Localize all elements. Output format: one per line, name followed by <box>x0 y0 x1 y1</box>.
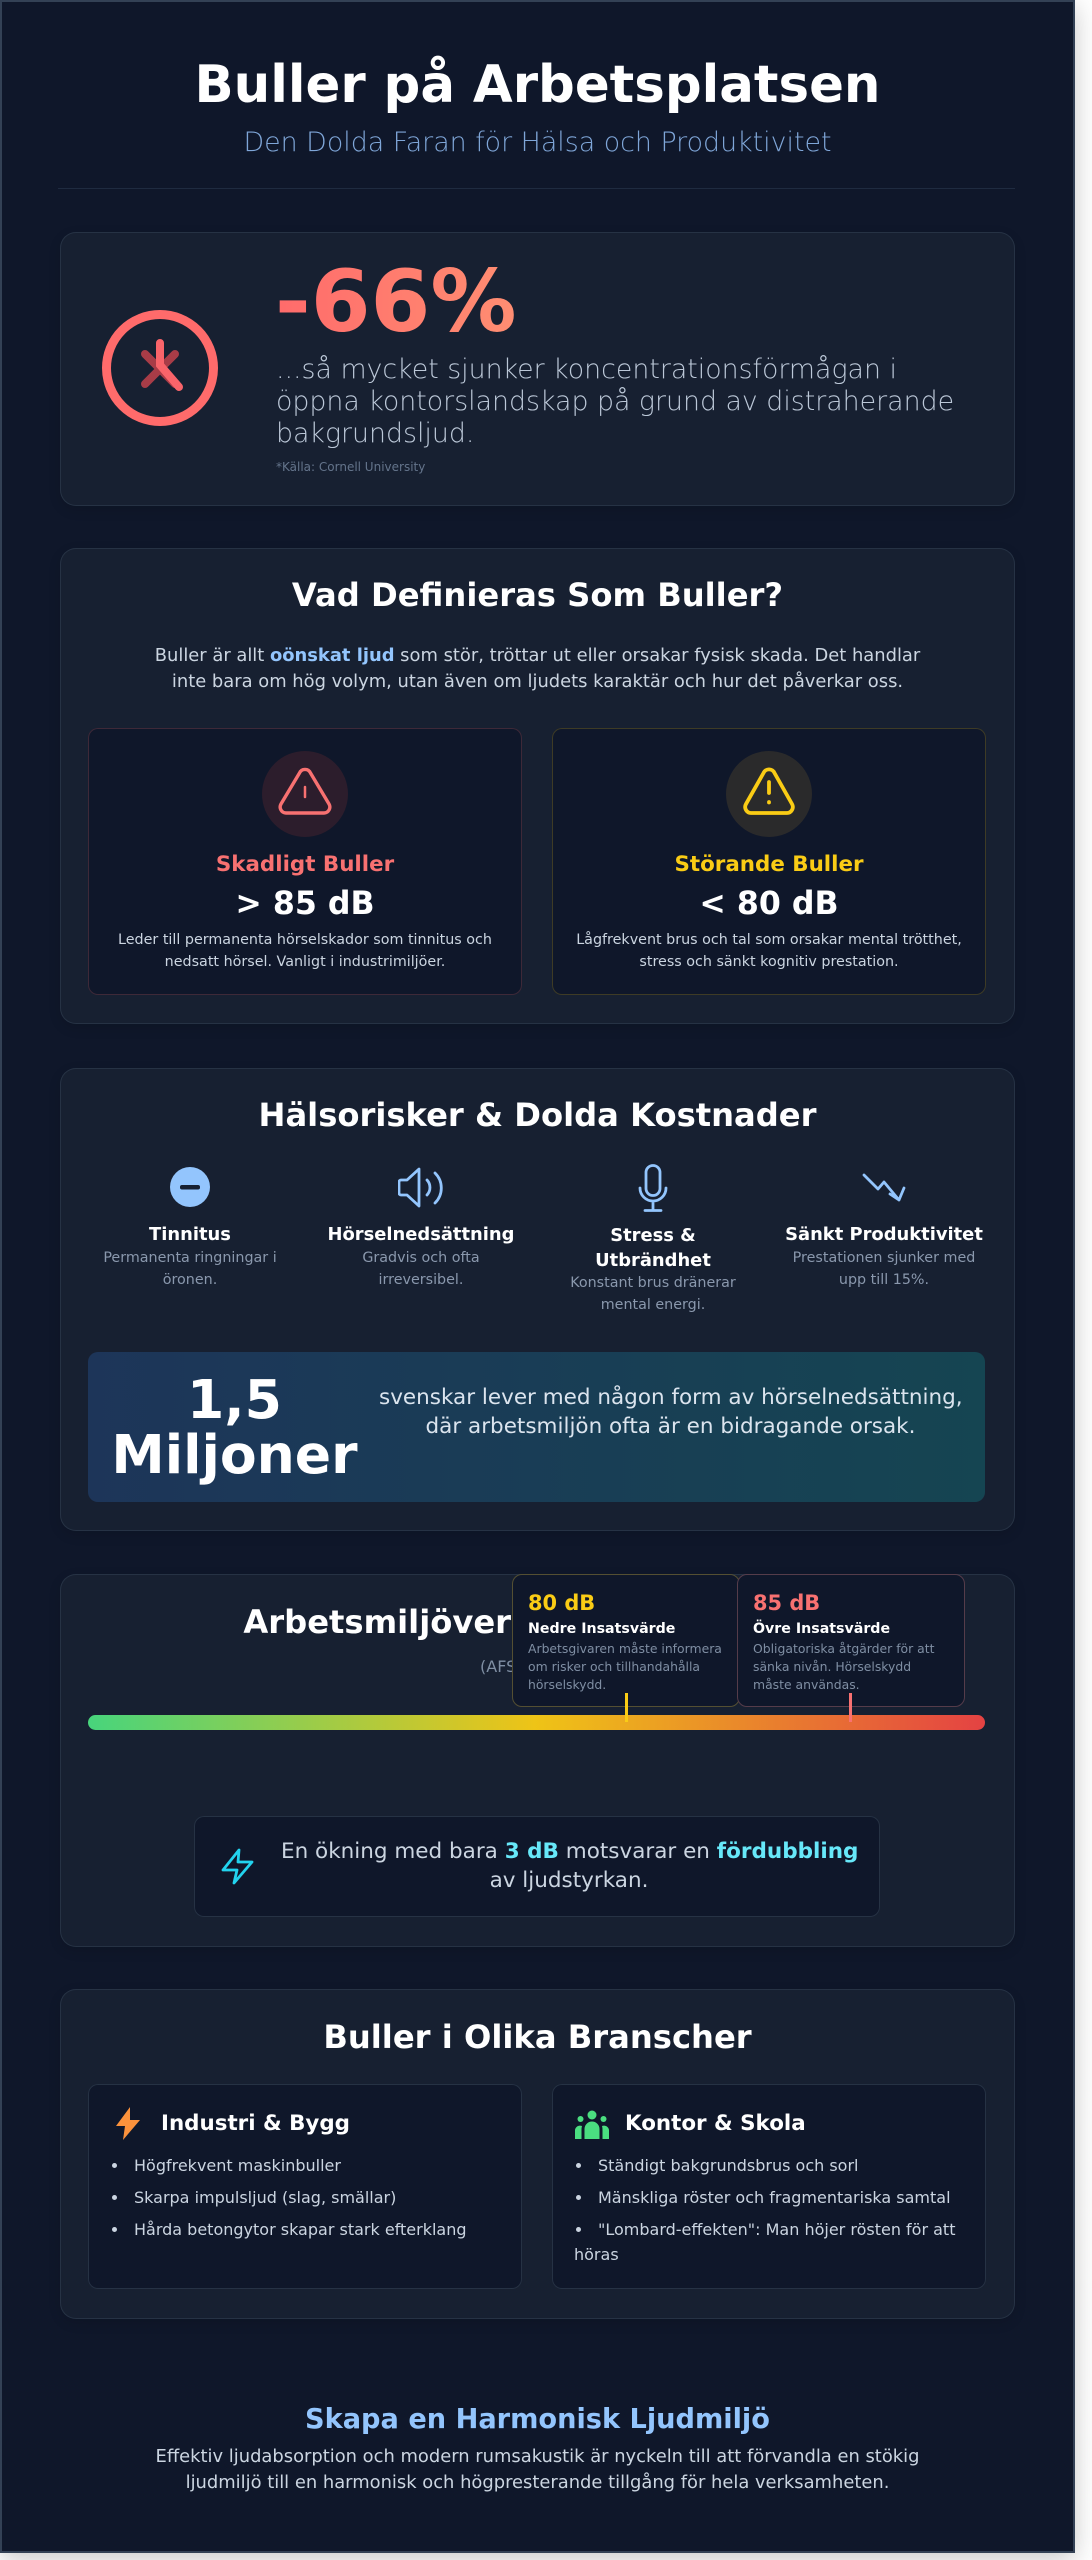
big number: -66% <box>275 252 517 352</box>
card title: Kontor & Skola <box>625 2111 806 2136</box>
list: Hårda betongytor skapar stark efterklang <box>134 2220 467 2239</box>
banner text: svenskar lever med någon form av hörselnedsättning, <box>379 1385 963 1410</box>
panel: health risks <box>60 1068 1015 1531</box>
big number: Miljoner <box>111 1423 358 1486</box>
subtitle: Den Dolda Faran för Hälsa och Produktivitet <box>243 127 832 158</box>
card: industry <box>88 2084 522 2289</box>
note text: av ljudstyrkan. <box>490 1868 648 1893</box>
panel: regulation limits <box>60 1574 1015 1947</box>
value: 85 dB <box>753 1591 820 1615</box>
risk title: Tinnitus <box>149 1224 231 1245</box>
decibel scale bar <box>88 1715 985 1730</box>
text: måste användas. <box>753 1677 860 1692</box>
text: Obligatoriska åtgärder för att <box>753 1641 934 1656</box>
icon: microphone <box>638 1164 668 1212</box>
source: *Källa: Cornell University <box>276 460 425 474</box>
note text <box>281 1839 858 1893</box>
panel: industries <box>60 1989 1015 2319</box>
value: 80 dB <box>528 1591 595 1615</box>
icon: trending down <box>862 1174 906 1202</box>
statistic description: öppna kontorslandskap på grund av distraherande <box>276 386 954 417</box>
marker: 80 dB <box>625 1693 628 1722</box>
banner: 1.5 million <box>88 1352 985 1502</box>
banner text: där arbetsmiljön ofta är en bidragande orsak. <box>426 1414 915 1439</box>
marker: 85 dB <box>849 1693 852 1722</box>
footer text: Effektiv ljudabsorption och modern rumsakustik är nyckeln till att förvandla en stökig <box>156 2446 919 2467</box>
intro text <box>155 645 920 692</box>
note text: En ökning med bara 3 dB motsvarar en fördubbling <box>281 1839 858 1864</box>
text: hörselskydd. <box>528 1677 606 1692</box>
risk text: Prestationen sjunker med <box>793 1250 975 1266</box>
risk text <box>362 1250 480 1288</box>
footer heading: Skapa en Harmonisk Ljudmiljö <box>305 2404 770 2435</box>
risk text <box>570 1275 736 1313</box>
list: Ständigt bakgrundsbrus och sorl <box>598 2156 858 2174</box>
list <box>574 2156 956 2264</box>
card text: Lågfrekvent brus och tal som orsakar mental trötthet, <box>576 932 962 948</box>
risk title: Hörselnedsättning <box>328 1224 514 1245</box>
icon: minus circle <box>170 1167 210 1207</box>
card text: Leder till permanenta hörselskador som tinnitus och <box>118 932 492 948</box>
risk title: Utbrändhet <box>595 1250 711 1271</box>
risk title <box>595 1225 711 1271</box>
text: sänka nivån. Hörselskydd <box>753 1659 911 1674</box>
text <box>753 1641 934 1692</box>
callout: 80 dB <box>512 1574 740 1707</box>
risk text: upp till 15%. <box>839 1272 929 1288</box>
threshold: > 85 dB <box>235 886 375 922</box>
risk: hearing loss <box>328 1168 514 1288</box>
card text: stress och sänkt kognitiv prestation. <box>639 954 899 970</box>
heading: Vad Definieras Som Buller? <box>292 576 783 614</box>
big number: 1,5 <box>187 1368 282 1431</box>
icon: clock with cross <box>102 310 218 426</box>
label: Övre Insatsvärde <box>753 1621 890 1637</box>
big number <box>111 1368 358 1486</box>
callout: 3 dB rule <box>194 1816 880 1917</box>
heading: Buller i Olika Branscher <box>323 2018 752 2056</box>
icon: speaker <box>398 1168 443 1208</box>
source note: (AFS 2005:16) <box>480 1657 594 1676</box>
list: Högfrekvent maskinbuller <box>134 2156 341 2174</box>
text: om risker och tillhandahålla <box>528 1659 700 1674</box>
statistic description: ...så mycket sjunker koncentrationsförmågan i <box>276 354 897 385</box>
callout: 85 dB <box>737 1574 965 1707</box>
icon: red warning <box>262 751 348 837</box>
intro text: Buller är allt oönskat ljud som stör, tröttar ut eller orsakar fysisk skada. Det handlar <box>155 645 920 666</box>
list: Skarpa impulsljud (slag, smällar) <box>134 2188 396 2207</box>
text: Arbetsgivaren måste informera <box>528 1641 722 1656</box>
text <box>528 1641 722 1692</box>
banner text <box>379 1385 963 1439</box>
risk text: Konstant brus dränerar <box>570 1275 736 1291</box>
risk text <box>103 1250 277 1288</box>
card: disturbing noise <box>552 728 986 995</box>
icon: orange bolt <box>116 2107 140 2140</box>
statistic description <box>276 354 954 449</box>
footer text: ljudmiljö till en harmonisk och högpresterande tillgång för hela verksamheten. <box>186 2472 889 2493</box>
risk text: irreversibel. <box>379 1272 463 1288</box>
risk text: öronen. <box>163 1272 217 1288</box>
risk: tinnitus <box>103 1167 277 1288</box>
risk text: mental energi. <box>601 1297 705 1313</box>
icon: people <box>575 2110 609 2139</box>
risk text: Gradvis och ofta <box>362 1250 480 1266</box>
heading: Hälsorisker & Dolda Kostnader <box>258 1096 816 1134</box>
card text <box>118 932 492 970</box>
statistic description: bakgrundsljud. <box>276 418 474 449</box>
icon: yellow warning <box>726 751 812 837</box>
card title: Industri & Bygg <box>161 2111 350 2136</box>
panel: definition <box>60 548 1015 1024</box>
risk text: Permanenta ringningar i <box>103 1250 277 1266</box>
risk: productivity <box>785 1174 983 1288</box>
list <box>112 2156 467 2239</box>
risk: stress <box>570 1164 736 1313</box>
card title: Skadligt Buller <box>216 852 394 877</box>
intro text: inte bara om hög volym, utan även om ljudets karaktär och hur det påverkar oss. <box>172 671 903 692</box>
risk text <box>793 1250 975 1288</box>
icon: bolt <box>222 1848 254 1884</box>
threshold: < 80 dB <box>699 886 839 922</box>
card text: nedsatt hörsel. Vanligt i industrimiljöer. <box>165 954 445 970</box>
card text <box>576 931 962 970</box>
card: harmful noise <box>88 728 522 995</box>
panel: key statistic <box>60 232 1015 506</box>
risk title: Sänkt Produktivitet <box>785 1224 983 1245</box>
list: "Lombard-effekten": Man höjer rösten för att höras <box>574 2220 955 2264</box>
footer text <box>156 2446 919 2493</box>
heading: Arbetsmiljöverkets Gränsvärden <box>243 1603 832 1641</box>
risk title: Stress & <box>610 1225 696 1246</box>
label: Nedre Insatsvärde <box>528 1621 675 1637</box>
title: Buller på Arbetsplatsen <box>194 55 881 115</box>
card: office <box>552 2084 986 2289</box>
card title: Störande Buller <box>674 852 864 877</box>
list: Mänskliga röster och fragmentariska samtal <box>598 2188 951 2207</box>
